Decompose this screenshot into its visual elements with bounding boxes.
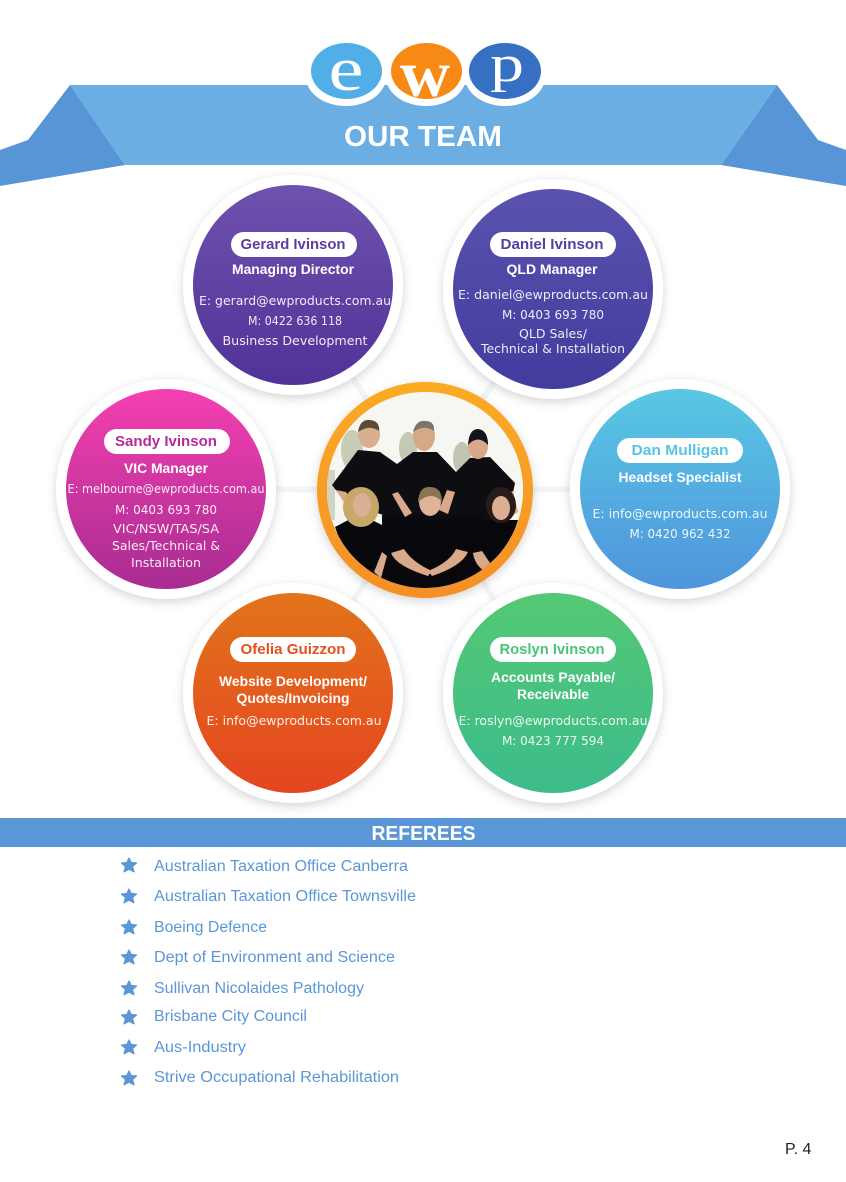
panel: Dan Mulligan: Dan Mulligan (632, 442, 728, 459)
title: OUR TEAM (344, 121, 502, 153)
logo: ewp (306, 36, 545, 111)
panel: Daniel Ivinson (443, 179, 663, 399)
panel: Dan Mulligan: Headset Specialist (618, 469, 742, 485)
panel: Daniel Ivinson: QLD Manager (506, 261, 598, 277)
panel: Dan Mulligan (570, 379, 790, 599)
panel: Gerard Ivinson: Managing Director (232, 261, 355, 277)
referees list: Brisbane City Council (154, 1008, 307, 1025)
logo: ewp: w (400, 38, 450, 111)
panel: Roslyn Ivinson: Receivable (517, 686, 589, 702)
front row heads (343, 487, 379, 527)
panel: Roslyn Ivinson: E: roslyn@ewproducts.com.au (458, 714, 648, 728)
panel: Daniel Ivinson: E: daniel@ewproducts.com.au (458, 288, 648, 302)
panel: Dan Mulligan: M: 0420 962 432 (630, 527, 730, 541)
referees list: Sullivan Nicolaides Pathology (154, 980, 364, 997)
back row bodies (332, 450, 515, 520)
panel: Ofelia Guizzon: Ofelia Guizzon (240, 641, 346, 658)
header ribbon (0, 85, 846, 186)
panel: Sandy Ivinson: VIC/NSW/TAS/SA (113, 522, 220, 536)
panel: Gerard Ivinson: M: 0422 636 118 (248, 314, 342, 328)
referees list: Australian Taxation Office Townsville (154, 888, 416, 905)
referees list (122, 858, 416, 1086)
panel: Sandy Ivinson: Sales/Technical & (112, 539, 220, 553)
panel: Sandy Ivinson: Sandy Ivinson (115, 433, 217, 450)
panel: Daniel Ivinson: M: 0403 693 780 (502, 308, 604, 322)
back row heads (358, 420, 380, 448)
referees list: Boeing Defence (154, 919, 267, 936)
panel: Roslyn Ivinson: Accounts Payable/ (491, 669, 615, 685)
back row arms (336, 490, 348, 502)
heading bar: referees: REFEREES (372, 823, 476, 845)
panel: Ofelia Guizzon: E: info@ewproducts.com.au (206, 714, 382, 728)
panel: Gerard Ivinson (183, 175, 403, 395)
logo: ewp: p (490, 36, 524, 93)
panel: Sandy Ivinson (56, 379, 276, 599)
panel: Ofelia Guizzon: Quotes/Invoicing (236, 690, 350, 706)
panel: Sandy Ivinson: VIC Manager (124, 460, 209, 476)
panel: Roslyn Ivinson: Roslyn Ivinson (500, 641, 604, 658)
referees list: Strive Occupational Rehabilitation (154, 1069, 399, 1086)
heading bar: referees (0, 818, 846, 847)
panel: Roslyn Ivinson: M: 0423 777 594 (502, 734, 604, 748)
panel: Gerard Ivinson: Gerard Ivinson (240, 236, 346, 253)
panel: Sandy Ivinson: M: 0403 693 780 (115, 503, 217, 517)
panel: Sandy Ivinson: Installation (131, 556, 201, 570)
page number: P. 4 (785, 1141, 812, 1158)
panel: Ofelia Guizzon (183, 583, 403, 803)
panel: Ofelia Guizzon: Website Development/ (219, 673, 367, 689)
panel: Daniel Ivinson: QLD Sales/ (519, 327, 588, 341)
panel: Daniel Ivinson: Daniel Ivinson (500, 236, 604, 253)
team photo (317, 382, 533, 598)
lower dark mass (335, 515, 518, 590)
panel: Gerard Ivinson: E: gerard@ewproducts.com.au (199, 294, 391, 308)
connector spokes (166, 285, 680, 693)
panel: Dan Mulligan: E: info@ewproducts.com.au (592, 507, 768, 521)
referees list: Dept of Environment and Science (154, 949, 395, 966)
referees list: Aus-Industry (154, 1039, 246, 1056)
panel: Daniel Ivinson: Technical & Installation (480, 342, 625, 356)
front row arms (391, 549, 432, 576)
referees list: Australian Taxation Office Canberra (154, 858, 408, 875)
panel: Roslyn Ivinson (443, 583, 663, 803)
logo: ewp: e (328, 36, 364, 104)
panel: Gerard Ivinson: Business Development (222, 334, 368, 348)
panel: Sandy Ivinson: E: melbourne@ewproducts.com.au (68, 482, 264, 496)
